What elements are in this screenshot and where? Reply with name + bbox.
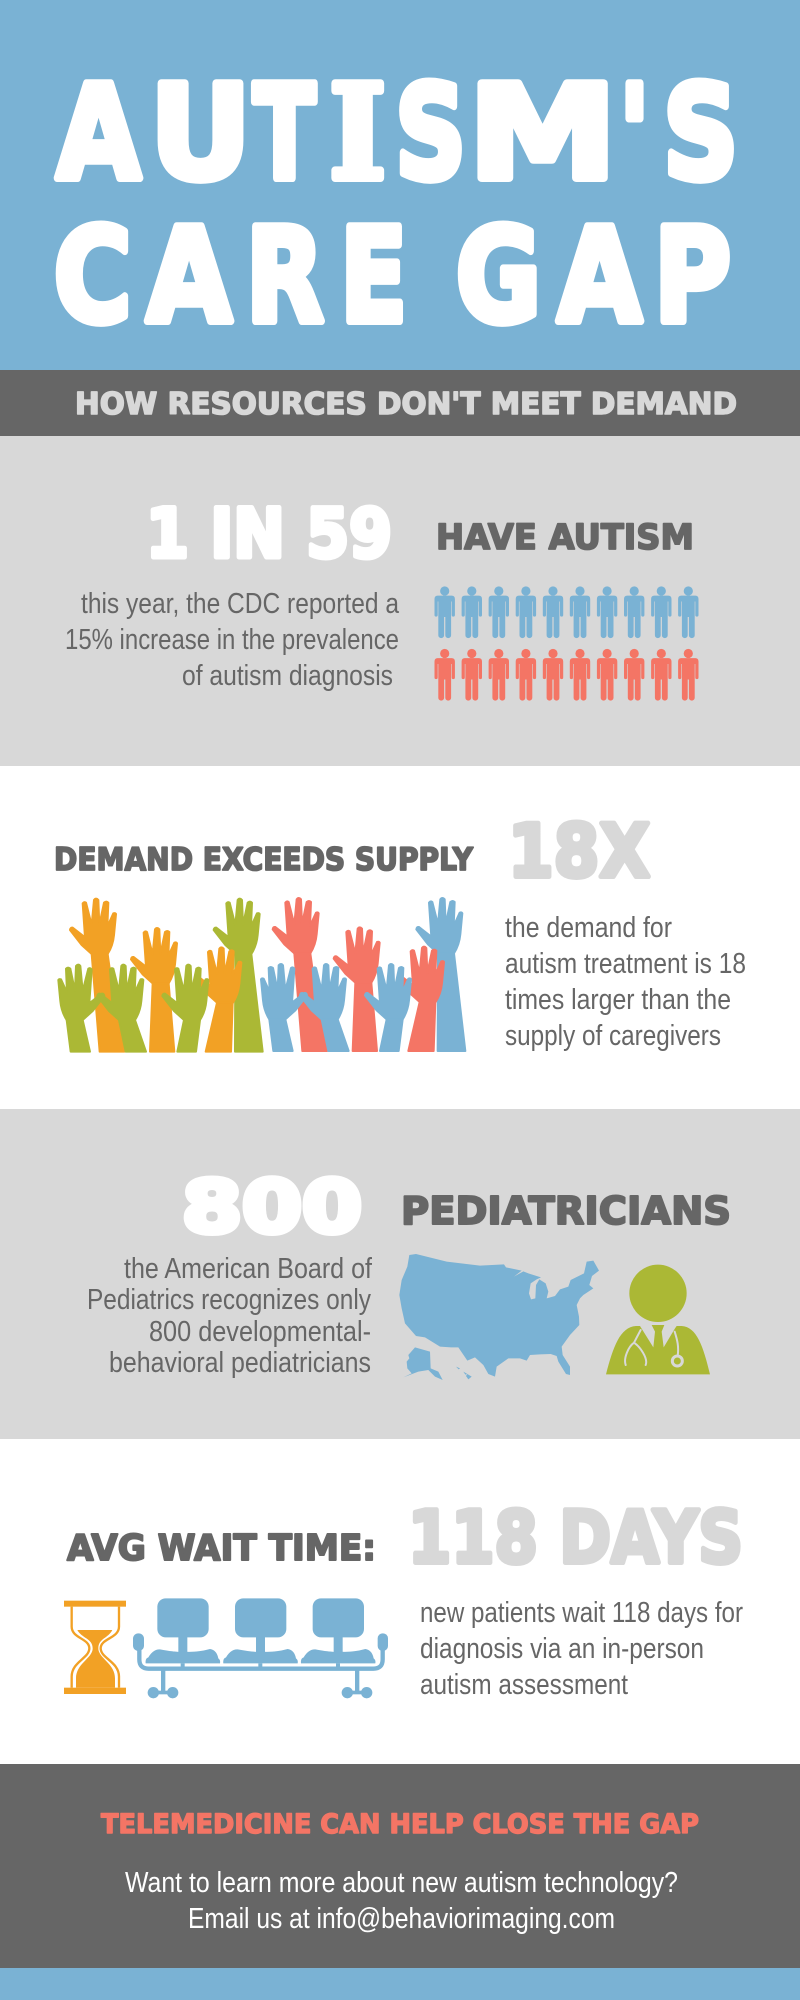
text: contact	[125, 1867, 678, 1935]
title: C	[54, 200, 132, 352]
icon: row of red people	[434, 649, 698, 701]
text: board recognition: the American Board of	[124, 1253, 373, 1285]
heading: pediatricians: PEDIATRICIANS	[401, 1189, 731, 1233]
title: S	[663, 57, 738, 209]
heading: have autism: HAVE AUTISM	[436, 518, 694, 558]
title: R	[246, 200, 324, 352]
title: U	[150, 57, 251, 209]
title: A	[558, 200, 642, 352]
icon: US map	[399, 1254, 599, 1380]
panel: 800 pediatricians	[0, 1109, 800, 1439]
panel: demand exceeds supply	[0, 766, 800, 1109]
title: T	[253, 57, 316, 209]
stat: 18X: 18X	[508, 810, 650, 894]
stat: 800: 800	[182, 1165, 362, 1249]
stat: 118 days: 118 DAYS	[408, 1496, 743, 1580]
title: P	[654, 200, 731, 352]
heading: demand exceeds supply: DEMAND EXCEEDS SUPPLY	[54, 842, 473, 878]
text: demand vs supply: times larger than the	[505, 984, 731, 1016]
panel: 1 in 59	[0, 436, 800, 766]
title: G	[456, 200, 541, 352]
text: CDC prevalence: of autism diagnosis	[182, 660, 393, 692]
footer strip	[0, 1968, 800, 2000]
heading: telemedicine: TELEMEDICINE CAN HELP CLOSE THE GAP	[101, 1809, 699, 1840]
text: demand vs supply: the demand for	[505, 912, 672, 944]
subtitle: HOW RESOURCES DON'T MEET DEMAND	[75, 387, 737, 422]
panel: header	[0, 0, 800, 370]
text: contact: Want to learn more about new autism technology?	[125, 1867, 678, 1899]
stat: 1 in 59: 1 IN 59	[146, 495, 392, 574]
title: '	[619, 57, 650, 209]
panel: wait time	[0, 1439, 800, 1764]
title: A	[56, 57, 141, 209]
text: demand vs supply: autism treatment is 18	[505, 948, 746, 980]
icon: waiting room chairs	[133, 1598, 388, 1698]
text: CDC prevalence	[65, 588, 400, 692]
text: demand vs supply: supply of caregivers	[505, 1020, 721, 1052]
title: E	[340, 200, 407, 352]
text: board recognition: 800 developmental-	[149, 1316, 371, 1348]
text: board recognition	[87, 1253, 373, 1379]
title: S	[395, 57, 466, 209]
text: CDC prevalence: 15% increase in the prevalence	[65, 624, 399, 656]
text: board recognition: behavioral pediatricians	[109, 1347, 371, 1379]
title: I	[329, 56, 386, 209]
text: CDC prevalence: this year, the CDC reported a	[81, 588, 400, 620]
title: M	[468, 57, 617, 209]
title: A	[146, 200, 232, 352]
text: patient wait: autism assessment	[420, 1669, 628, 1701]
text: patient wait	[420, 1597, 743, 1701]
heading: avg wait time: AVG WAIT TIME:	[67, 1528, 376, 1569]
panel: subtitle band	[0, 370, 800, 436]
title	[54, 56, 738, 352]
text: demand vs supply	[505, 912, 746, 1052]
icon: row of blue people	[434, 586, 698, 638]
icon: doctor	[606, 1265, 710, 1374]
panel: footer call to action	[0, 1764, 800, 1968]
text: patient wait: diagnosis via an in-person	[420, 1633, 704, 1665]
icon: raised hands	[58, 898, 465, 1052]
text: board recognition: Pediatrics recognizes only	[87, 1284, 371, 1316]
icon: hourglass	[64, 1601, 126, 1694]
text: patient wait: new patients wait 118 days for	[420, 1597, 743, 1629]
text: contact: Email us at info@behaviorimaging.com	[188, 1903, 615, 1935]
